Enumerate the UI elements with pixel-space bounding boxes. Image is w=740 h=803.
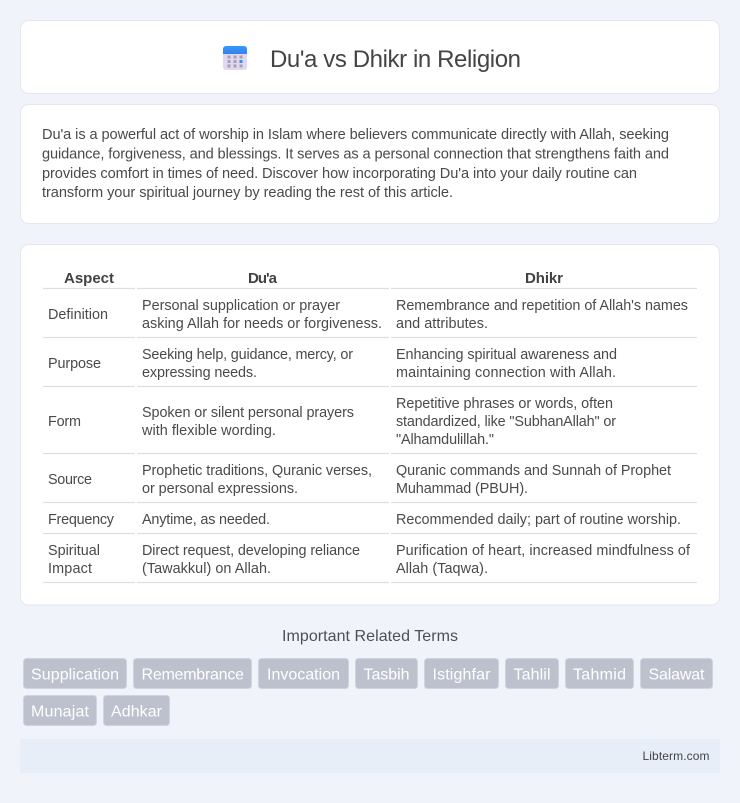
table header row: Dhikr [525,270,563,287]
table row: spiritual impact: Allah (Taqwa). [396,561,488,577]
table row: definition: Personal supplication or prayer [142,298,340,314]
table row: source: Source [48,472,92,488]
table row: definition: asking Allah for needs or forgiveness. [142,316,382,332]
table row: spiritual impact: (Tawakkul) on Allah. [142,561,271,577]
related term tags [24,658,712,726]
table row: purpose: expressing needs. [142,365,257,381]
related term tags: Munajat [31,704,90,720]
table row: frequency: Anytime, as needed. [142,512,270,528]
panel: comparison table [20,244,720,605]
table row: spiritual impact: Direct request, developing reliance [142,543,360,559]
related term tags: Salawat [648,666,705,684]
panel: introduction [20,104,720,224]
table row: source: Prophetic traditions, Quranic verses, [142,463,372,479]
related term tags: Tahmid [573,666,626,684]
table row: definition: Remembrance and repetition of Allah's names [396,298,688,314]
table row: form: standardized, like "SubhanAllah" or [396,414,616,430]
table row: form: with flexible wording. [141,423,276,439]
table row: definition: and attributes. [396,316,488,332]
related term tags: Adhkar [111,704,163,720]
table row: form: Repetitive phrases or words, often [396,396,613,412]
table row: spiritual impact: Spiritual [48,543,100,559]
text block: intro paragraph [42,127,669,201]
text block: intro paragraph: Du'a is a powerful act of worship in Islam where believers communicate directly with Allah, seeking [42,127,669,143]
table row: form: Form [48,414,81,430]
table row: source [43,463,697,502]
table row: frequency: Frequency [48,512,115,528]
related term tags: Tahlil [514,666,550,684]
title: Du'a vs Dhikr in Religion [270,46,521,73]
table row: spiritual impact: Purification of heart, increased mindfulness of [396,543,691,559]
table row: frequency [43,512,697,534]
table header row [43,270,697,288]
table row: source: Muhammad (PBUH). [396,481,528,497]
footer: Libterm.com [642,749,710,763]
panel: header [20,20,720,94]
table row: purpose: Enhancing spiritual awareness and [396,347,617,363]
related term tags: Invocation [267,666,340,684]
table row: form: "Alhamdulillah." [396,432,494,448]
table header row: Aspect [64,270,114,287]
icon: calendar [223,46,247,70]
table row: spiritual impact [43,543,697,582]
text block: intro paragraph: transform your spiritual journey by reading the rest of this article. [42,185,453,201]
related term tags: Supplication [31,666,119,684]
table row: definition: Definition [48,307,108,323]
table row: frequency: Recommended daily; part of routine worship. [396,512,681,528]
table row: purpose: Seeking help, guidance, mercy, or [142,347,353,363]
related term tags: Remembrance [142,666,244,684]
table row: source: or personal expressions. [142,481,298,497]
table row: source: Quranic commands and Sunnah of Prophet [396,463,671,479]
related term tags: Istighfar [432,666,491,684]
heading: related terms: Important Related Terms [282,628,458,645]
text block: intro paragraph: guidance, forgiveness, and blessings. It serves as a personal connection that strengthens faith and [42,146,669,162]
footer [20,739,720,773]
table row: definition [43,298,697,338]
table row: purpose: Purpose [48,356,101,372]
table row: purpose: maintaining connection with Allah. [396,365,616,381]
table row: form: Spoken or silent personal prayers [142,405,354,421]
table row: purpose [43,347,697,386]
table row: spiritual impact: Impact [48,561,92,577]
table header row: Du'a [248,270,278,287]
text block: intro paragraph: provides comfort in times of need. Discover how incorporating Du'a into your daily routine can [42,166,637,182]
table row: form [43,396,697,454]
related term tags: Tasbih [364,666,410,684]
